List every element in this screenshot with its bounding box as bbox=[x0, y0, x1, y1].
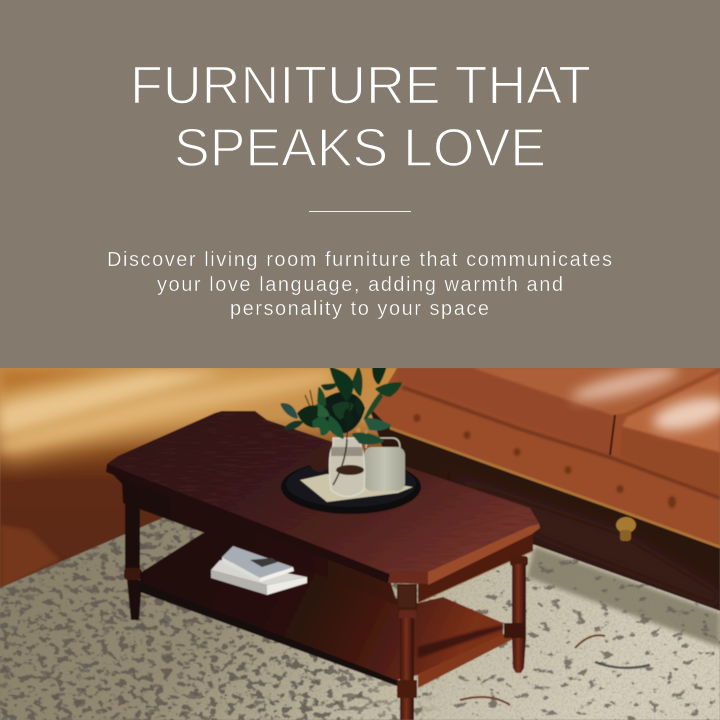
table top bbox=[100, 405, 545, 585]
wood floor bbox=[0, 368, 720, 611]
title: FURNITURE THAT bbox=[130, 56, 591, 116]
table apron bbox=[107, 468, 533, 606]
plant leaves bbox=[282, 368, 401, 443]
title bbox=[130, 56, 591, 178]
background panel bbox=[0, 0, 720, 368]
subtitle text: personality to your space bbox=[230, 298, 489, 320]
sofa seat cushions bbox=[397, 368, 613, 455]
front edge moulding bbox=[106, 464, 390, 583]
paper on tray bbox=[300, 474, 413, 502]
right leg bbox=[504, 556, 528, 673]
lower shelf bbox=[140, 530, 517, 688]
title: SPEAKS LOVE bbox=[174, 118, 546, 178]
tray bbox=[281, 460, 421, 514]
sofa rail and piping bbox=[402, 387, 720, 498]
photo: living room bbox=[0, 361, 720, 720]
sofa body bbox=[372, 368, 720, 547]
subtitle text: Discover living room furniture that communicates bbox=[107, 249, 612, 271]
sofa highlights bbox=[569, 361, 681, 407]
subtitle text bbox=[107, 249, 612, 320]
bowl bbox=[310, 461, 328, 472]
sofa tufting bbox=[414, 414, 676, 508]
leather sofa bbox=[372, 361, 720, 547]
glass vase bbox=[329, 438, 365, 496]
back left leg bbox=[124, 503, 142, 620]
rug bbox=[0, 500, 720, 720]
books on shelf bbox=[211, 546, 307, 595]
front leg bbox=[397, 584, 417, 720]
divider line bbox=[309, 211, 411, 212]
coffee table bbox=[100, 368, 545, 720]
sofa foot bbox=[616, 517, 636, 541]
candle jar bbox=[364, 438, 405, 491]
subtitle text: your love language, adding warmth and bbox=[157, 274, 563, 296]
